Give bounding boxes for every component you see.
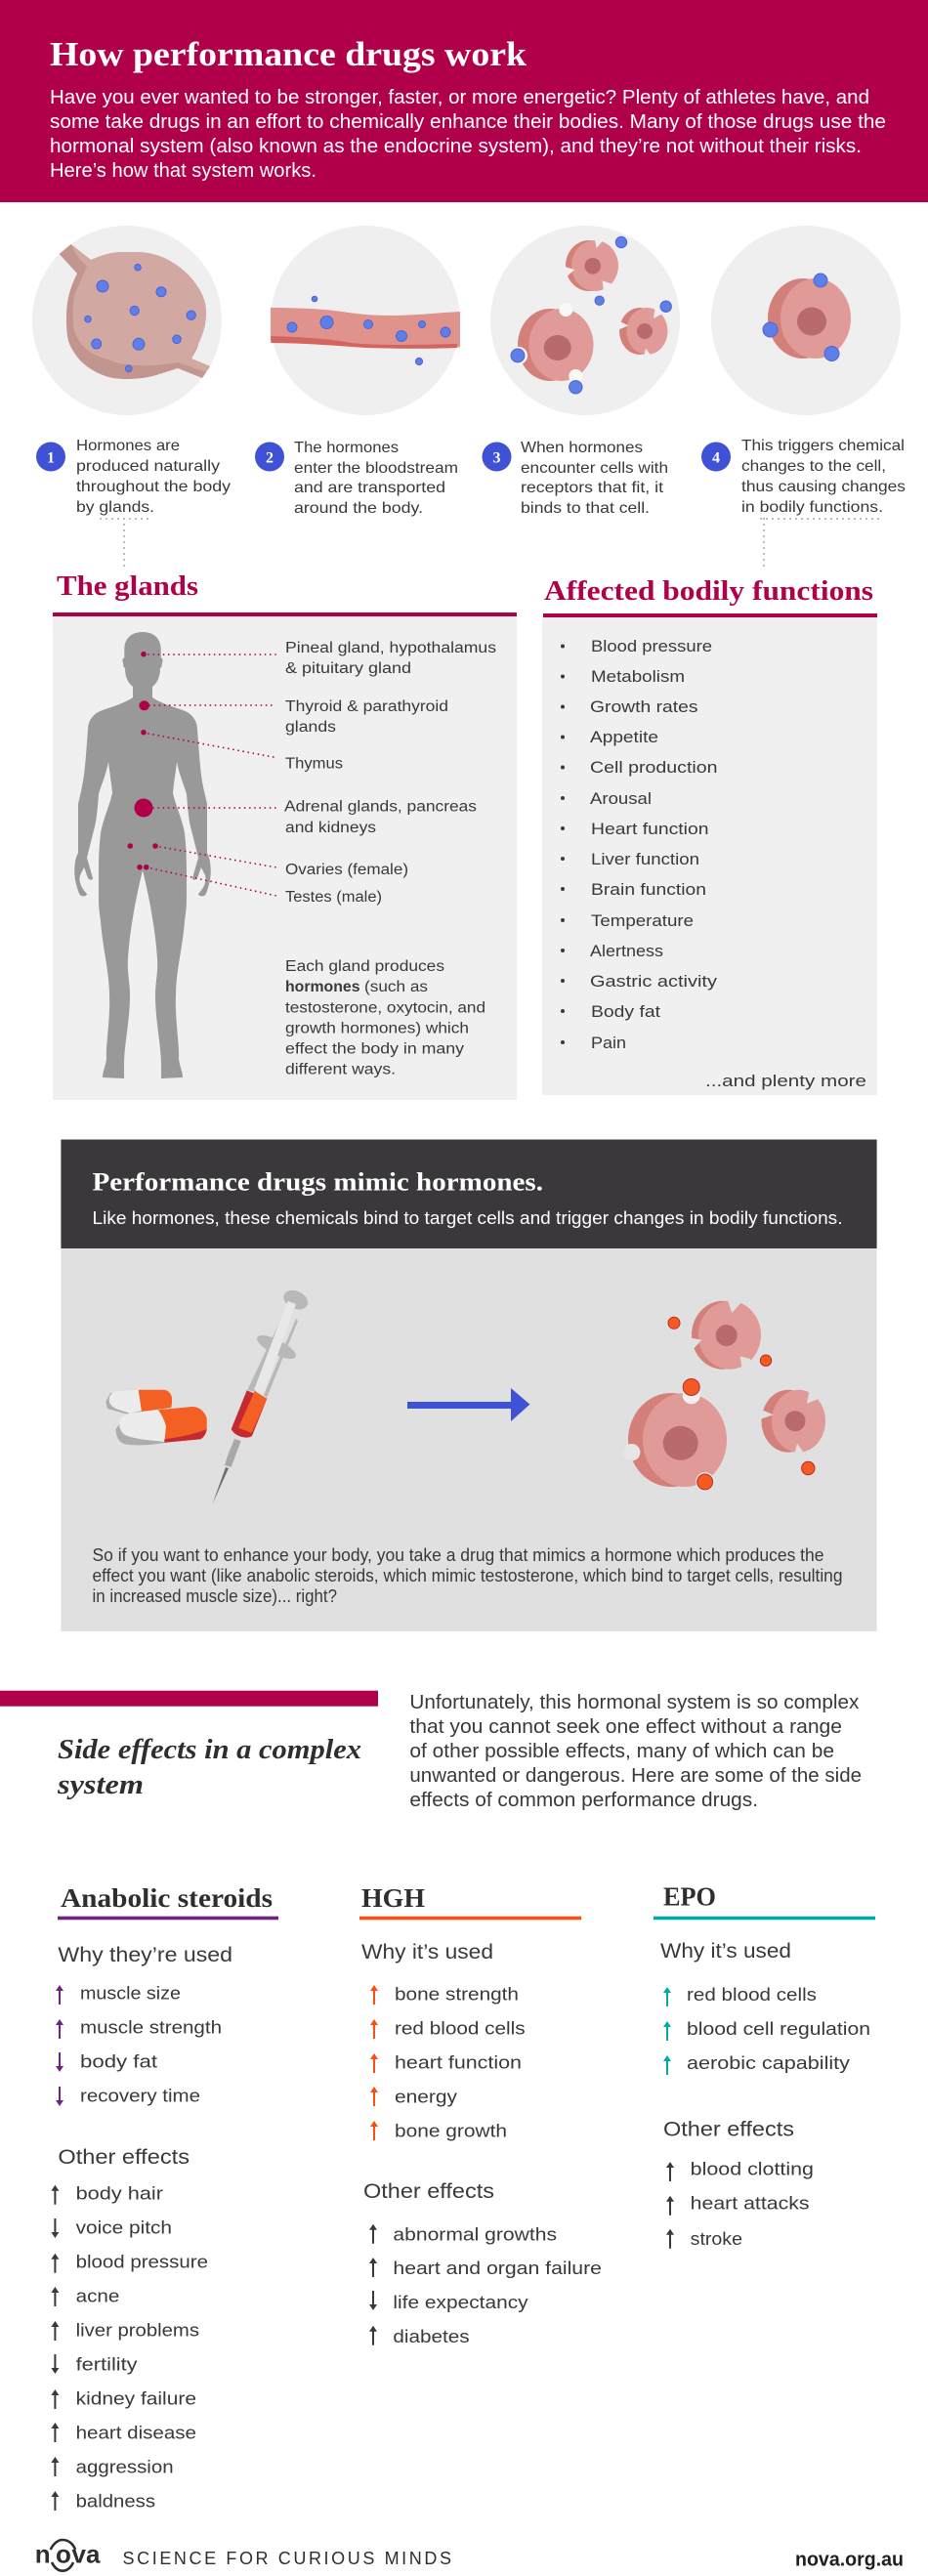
other effects: voice pitch [76, 2217, 172, 2238]
other effects: Other effects [58, 2146, 190, 2169]
heading: affected bodily functions: Affected bodily functions [544, 575, 873, 607]
other effects: baldness [76, 2491, 155, 2512]
large cell [623, 1386, 727, 1491]
gland note [285, 958, 485, 1078]
function list: Heart function [591, 820, 709, 838]
why they're used [56, 1944, 232, 2106]
step 4: thus causing changes [741, 479, 906, 495]
step 4: 4 [712, 449, 720, 467]
why they're used: muscle strength [80, 2017, 222, 2038]
side effects intro: of other possible effects, many of which can be [409, 1741, 834, 1762]
step 2 [255, 440, 458, 517]
other effects: life expectancy [393, 2292, 528, 2312]
other effects: liver problems [76, 2320, 199, 2341]
step 1: 1 [47, 449, 55, 467]
dark heading band: Like hormones, these chemicals bind to target cells and trigger changes in bodily functions. [92, 1208, 842, 1228]
step 1: by glands. [76, 499, 154, 516]
tagline: SCIENCE FOR CURIOUS MINDS [123, 2549, 451, 2568]
explanation text: effect you want (like anabolic steroids, which mimic testosterone, which bind to target cells, resulting [92, 1566, 842, 1585]
explanation text: in increased muscle size)... right? [92, 1586, 337, 1606]
step 4: This triggers chemical [741, 438, 905, 454]
top cell [688, 1297, 761, 1370]
step 2: around the body. [294, 500, 423, 517]
gland labels: Thyroid & parathyroid [285, 698, 448, 715]
right cell [615, 305, 668, 358]
step 1 [36, 438, 231, 516]
gland note: testosterone, oxytocin, and [285, 1000, 485, 1016]
gland note: (such as [364, 979, 428, 995]
function list: Pain [591, 1034, 626, 1052]
gland note: effect the body in many [285, 1041, 464, 1057]
other effects: blood pressure [76, 2252, 208, 2272]
right cell [757, 1387, 825, 1456]
step 1: Hormones are [76, 438, 180, 454]
function list: Metabolism [591, 667, 685, 686]
step 2: The hormones [294, 440, 399, 456]
header banner [0, 0, 928, 202]
explanation text [92, 1545, 842, 1606]
url: nova.org.au [795, 2550, 904, 2571]
top cell [562, 235, 618, 293]
why they're used: recovery time [80, 2086, 200, 2106]
explanation text: So if you want to enhance your body, you take a drug that mimics a hormone which produces the [92, 1545, 824, 1565]
function list: Brain function [591, 880, 706, 899]
other effects: Other effects [663, 2119, 794, 2141]
why it's used: bone strength [395, 1984, 519, 2005]
heading: Anabolic steroids [61, 1883, 273, 1913]
column: anabolic steroids [51, 1883, 278, 2512]
connector: step 1 to glands [101, 519, 151, 570]
function list: Alertness [590, 942, 663, 960]
title: How performance drugs work [50, 35, 527, 73]
step 4: in bodily functions. [741, 499, 883, 516]
gland labels: glands [285, 719, 336, 736]
why it's used: bone growth [395, 2121, 507, 2141]
intro text [50, 87, 886, 182]
other effects [51, 2146, 208, 2512]
heading: HGH [361, 1883, 425, 1913]
connector: step 4 to bodily functions [761, 519, 880, 571]
other effects [663, 2119, 814, 2249]
gland markers [127, 652, 158, 869]
intro text: hormonal system (also known as the endocrine system), and they’re not without their risks. [50, 136, 862, 157]
leader lines [148, 655, 276, 896]
other effects: diabetes [393, 2326, 470, 2346]
step 3: binds to that cell. [521, 500, 650, 517]
footer [35, 2539, 904, 2571]
dark heading band [61, 1139, 877, 1248]
step 3 [483, 440, 668, 517]
other effects: acne [76, 2286, 119, 2306]
intro text: Here’s how that system works. [50, 160, 316, 182]
side effects intro: Unfortunately, this hormonal system is so complex [409, 1692, 859, 1713]
why it's used: heart function [395, 2052, 522, 2073]
function list: Liver function [591, 850, 699, 868]
other effects: heart disease [76, 2423, 196, 2443]
gland labels: Adrenal glands, pancreas [284, 799, 477, 815]
illustration: drug binding to cells [623, 1297, 825, 1491]
function list: Temperature [591, 911, 694, 930]
arrow: drug to cells [407, 1388, 529, 1421]
heading: the glands: The glands [57, 570, 198, 602]
function list [590, 637, 718, 1052]
step 3: When hormones [521, 440, 643, 456]
function list: Growth rates [590, 697, 697, 716]
why it's used: red blood cells [395, 2018, 526, 2039]
heading: EPO [663, 1882, 716, 1912]
why it's used: aerobic capability [687, 2052, 851, 2073]
other effects: stroke [691, 2228, 742, 2249]
intro text: Have you ever wanted to be stronger, faster, or more energetic? Plenty of athletes have, and [50, 87, 869, 108]
icon: syringe [212, 1287, 311, 1504]
gland labels: Thymus [285, 756, 343, 772]
illustration: gland producing hormones [32, 226, 222, 415]
logo: nova: nova [35, 2539, 101, 2568]
side effects intro: unwanted or dangerous. Here are some of the side [409, 1765, 862, 1787]
function list: Arousal [590, 789, 652, 808]
function list: Gastric activity [590, 972, 718, 991]
column: EPO [654, 1882, 875, 2249]
gland labels: Testes (male) [285, 889, 382, 906]
panel: performance drugs mimic hormones [61, 1139, 877, 1631]
other effects: aggression [76, 2457, 174, 2477]
gland labels [284, 640, 496, 906]
dark heading band: Performance drugs mimic hormones. [92, 1167, 543, 1196]
side effects intro: effects of common performance drugs. [409, 1790, 758, 1811]
step 2: enter the bloodstream [294, 460, 458, 477]
side effects intro [409, 1692, 862, 1811]
panel: affected bodily functions [542, 575, 877, 1095]
other effects: heart attacks [691, 2193, 809, 2214]
step 2: and are transported [294, 480, 445, 496]
step 3: encounter cells with [521, 460, 668, 477]
step 3: 3 [492, 449, 500, 467]
function list: Body fat [591, 1002, 660, 1021]
why they're used: Why they’re used [58, 1944, 232, 1966]
step 4: changes to the cell, [741, 458, 886, 475]
other effects: abnormal growths [393, 2223, 557, 2244]
other effects: heart and organ failure [393, 2258, 602, 2278]
why it's used [361, 1941, 526, 2141]
gland labels: & pituitary gland [285, 660, 411, 677]
bullets [561, 645, 565, 1044]
panel: the glands [53, 570, 517, 1100]
intro text: some take drugs in an effort to chemically enhance their bodies. Many of those drugs use the [50, 111, 886, 133]
why it's used: red blood cells [687, 1984, 817, 2005]
why it's used: Why it’s used [361, 1941, 493, 1964]
gland labels: Pineal gland, hypothalamus [285, 640, 496, 656]
heading: side effects: Side effects in a complex [58, 1734, 361, 1765]
illustration: blood vessel with hormones [271, 226, 460, 415]
why it's used: Why it’s used [660, 1940, 791, 1963]
gland note: growth hormones) which [285, 1020, 469, 1037]
other effects: body hair [76, 2183, 163, 2204]
step 2: 2 [266, 449, 274, 467]
column: HGH [359, 1883, 602, 2346]
step 1: produced naturally [76, 458, 220, 475]
function list: Cell production [590, 758, 717, 777]
heading: side effects: system [57, 1769, 144, 1800]
other effects: blood clotting [691, 2159, 814, 2179]
function list: Blood pressure [591, 637, 712, 655]
gland note: Each gland produces [285, 958, 444, 975]
heading: side effects [57, 1734, 361, 1800]
large cell [510, 303, 594, 383]
step 1: throughout the body [76, 479, 231, 495]
why they're used: muscle size [80, 1983, 181, 2004]
illustration: hormones meet cells with receptors [490, 226, 680, 415]
other effects: Other effects [363, 2180, 494, 2203]
gland note: hormones [285, 979, 359, 995]
function list: Appetite [590, 728, 658, 746]
other effects: fertility [76, 2354, 138, 2375]
gland labels: Ovaries (female) [285, 862, 408, 878]
why they're used: body fat [80, 2051, 157, 2072]
and plenty more note: ...and plenty more [705, 1072, 866, 1090]
why it's used [660, 1940, 870, 2075]
icon: capsules [105, 1390, 207, 1445]
step 3: receptors that fit, it [521, 480, 664, 496]
why it's used: energy [395, 2087, 458, 2107]
gland note: different ways. [285, 1062, 396, 1078]
step 4 [701, 438, 906, 516]
other effects: kidney failure [76, 2388, 196, 2409]
other effects [363, 2180, 602, 2346]
why it's used: blood cell regulation [687, 2018, 870, 2039]
illustration: hormones bound to a cell [711, 226, 901, 415]
gland labels: and kidneys [285, 820, 376, 836]
accent bar [0, 1691, 378, 1707]
side effects intro: that you cannot seek one effect without a range [409, 1716, 842, 1738]
body silhouette [74, 632, 211, 1078]
